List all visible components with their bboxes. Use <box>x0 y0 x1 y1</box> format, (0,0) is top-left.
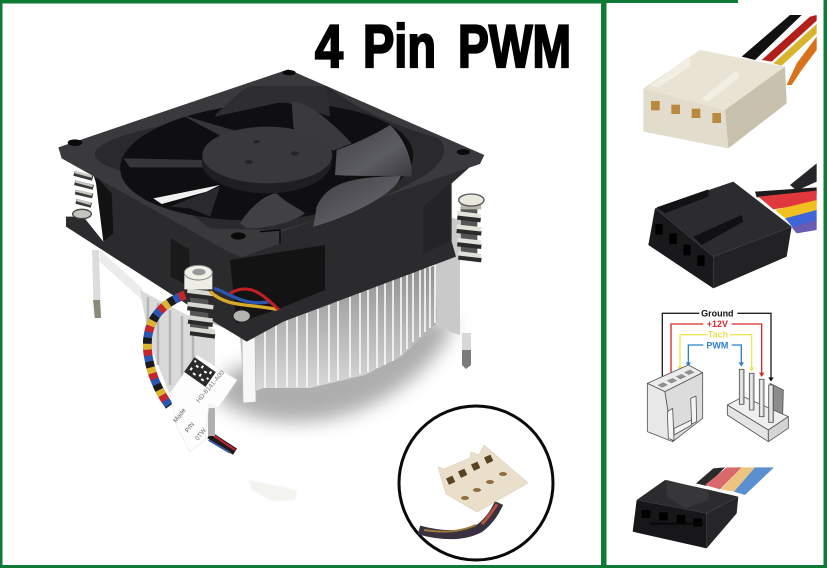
wires <box>742 15 817 85</box>
wire lines <box>662 313 771 380</box>
title: Pin <box>363 13 436 80</box>
wires <box>755 163 817 233</box>
heatsink shadow <box>215 320 455 422</box>
wire labels: Ground <box>701 308 734 318</box>
right spring screw <box>457 194 484 260</box>
lower wire end <box>209 435 235 452</box>
panel: black 4-pin connector <box>648 163 817 288</box>
wire labels: Tach <box>708 330 728 340</box>
title: PWM <box>458 13 571 80</box>
wire labels <box>701 308 734 350</box>
callout: connector close-up circle <box>399 406 553 560</box>
wires <box>696 467 774 495</box>
fan cable <box>147 288 279 453</box>
close-up connector <box>438 445 528 512</box>
connector body <box>643 50 785 110</box>
panel: black keyed fan connector <box>633 467 774 548</box>
fan hub <box>202 130 332 193</box>
panel: cream 4-pin connector <box>643 15 817 148</box>
wire labels: +12V <box>707 319 728 329</box>
close-up cable <box>419 503 499 535</box>
upper wire run <box>210 292 277 309</box>
QR code <box>184 357 216 387</box>
product label: P/N <box>184 421 196 434</box>
fan mounting holes <box>68 139 82 146</box>
rear spring screw <box>73 172 93 219</box>
wire labels: PWM <box>706 340 728 350</box>
female housing <box>647 365 703 442</box>
fan <box>58 69 484 342</box>
twisted wire loop <box>147 295 185 406</box>
product label <box>170 355 237 452</box>
connector body <box>637 480 738 513</box>
panel: CPU cooler photo <box>58 69 484 501</box>
front spring screw <box>184 265 250 336</box>
pale connector end <box>248 480 297 501</box>
connector body <box>655 182 792 257</box>
product label: 0TW <box>194 426 209 442</box>
fan opening <box>95 86 444 230</box>
male header <box>727 369 788 442</box>
arrowheads <box>660 377 774 382</box>
title <box>315 13 571 80</box>
heatsink body <box>92 212 471 403</box>
fan blades <box>292 102 352 151</box>
heatsink fins <box>265 264 435 388</box>
product label: Made <box>172 407 188 424</box>
metal leg under label <box>208 408 215 436</box>
title: 4 <box>315 13 344 80</box>
product label: HD-8141-A00 <box>195 369 226 404</box>
fan frame top <box>58 69 484 257</box>
fan side wall and lower flange <box>60 153 483 342</box>
wiring diagram <box>647 308 788 442</box>
